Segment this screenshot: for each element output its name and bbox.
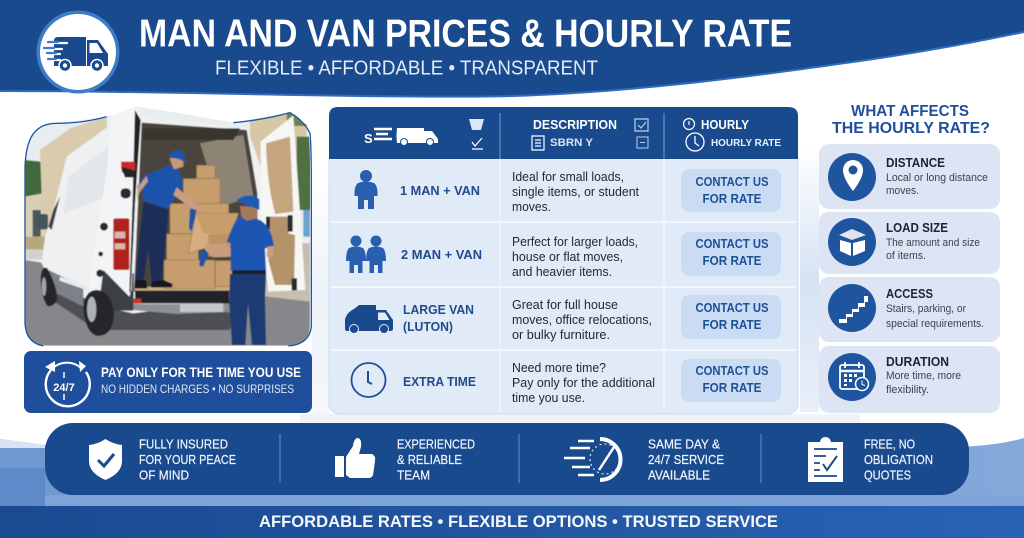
- item: experienced team: EXPERIENCED: [397, 438, 475, 452]
- row: large van: Great for full house: [512, 298, 618, 312]
- item: experienced team: [335, 438, 475, 482]
- panel: guarantees bar: [45, 423, 969, 495]
- row: large van: CONTACT US: [696, 300, 769, 315]
- item: fully insured: FOR YOUR PEACE: [139, 453, 236, 467]
- row: extra time: CONTACT US: [696, 363, 769, 378]
- panel: duration: flexibility.: [886, 384, 929, 396]
- row: 1 man + van: [354, 169, 781, 214]
- row: 1 man + van: CONTACT US: [696, 174, 769, 189]
- row: 2 man + van: 2 MAN + VAN: [401, 247, 482, 262]
- panel: distance: [819, 144, 1000, 209]
- icon: map pin: [843, 160, 863, 191]
- panel: load size: [819, 212, 1000, 274]
- table header: [329, 107, 798, 159]
- row: extra time: FOR RATE: [702, 380, 762, 395]
- footer band: [0, 506, 1024, 538]
- item: free quotes: FREE, NO: [864, 438, 915, 452]
- item: free quotes: [808, 437, 933, 482]
- panel: distance: Local or long distance: [886, 172, 988, 184]
- row: large van: [345, 295, 781, 342]
- panel: pay only for time you use: PAY ONLY FOR THE TIME YOU USE: [101, 364, 301, 380]
- icon: shield: [89, 439, 122, 480]
- item: experienced team: & RELIABLE: [397, 453, 462, 467]
- icon: person: [354, 170, 378, 209]
- icon: van logo badge: [36, 10, 120, 94]
- icon: clipboard: [808, 437, 843, 482]
- heading: what affects the hourly rate: WHAT AFFECTS: [851, 103, 969, 120]
- table header: HOURLY RATE: [711, 137, 781, 149]
- row: large van: LARGE VAN: [403, 302, 474, 317]
- icon: luton van: [345, 305, 393, 334]
- row: large van: FOR RATE: [702, 317, 762, 332]
- panel: distance: moves.: [886, 185, 919, 197]
- icon: header van: S: [364, 131, 373, 146]
- panel: duration: DURATION: [886, 355, 949, 369]
- heading: what affects the hourly rate: THE HOURLY RATE?: [832, 120, 990, 137]
- footer band: AFFORDABLE RATES • FLEXIBLE OPTIONS • TRUSTED SERVICE: [259, 513, 778, 531]
- icon: calendar with clock: [840, 362, 868, 390]
- row: 1 man + van: single items, or student: [512, 185, 640, 199]
- row: 2 man + van: Perfect for larger loads,: [512, 235, 638, 249]
- panel: distance: DISTANCE: [886, 156, 945, 170]
- table header: HOURLY: [701, 118, 750, 132]
- panel: access: [819, 277, 1000, 342]
- panel: pay only for time you use: [24, 351, 312, 413]
- icon: stairs: [839, 296, 868, 323]
- icon: header van: [364, 128, 438, 146]
- item: same day service: 24/7 SERVICE: [648, 453, 724, 467]
- icon: box: [839, 229, 866, 256]
- row: 2 man + van: house or flat moves,: [512, 250, 623, 264]
- panel: load size: LOAD SIZE: [886, 221, 948, 235]
- item: experienced team: TEAM: [397, 468, 430, 482]
- icon: 24/7 clock: 24/7: [53, 382, 75, 394]
- item: same day service: SAME DAY &: [648, 438, 721, 452]
- panel: price table: [329, 107, 798, 414]
- icon: fast clock: [564, 439, 620, 480]
- row: 2 man + van: and heavier items.: [512, 265, 612, 279]
- photo: movers loading a van: [20, 100, 320, 353]
- table header: DESCRIPTION: [533, 118, 617, 132]
- row: extra time: EXTRA TIME: [403, 374, 476, 389]
- bottom wave background: [0, 438, 1024, 506]
- panel: access: Stairs, parking, or: [886, 303, 966, 315]
- row: extra time: Pay only for the additional: [512, 376, 655, 390]
- item: same day service: AVAILABLE: [648, 468, 710, 482]
- row: 2 man + van: [346, 232, 781, 279]
- row: extra time: Need more time?: [512, 361, 606, 375]
- panel: pay only for time you use: NO HIDDEN CHARGES • NO SURPRISES: [101, 382, 294, 396]
- title: MAN AND VAN PRICES & HOURLY RATE: [139, 12, 792, 56]
- panel: duration: More time, more: [886, 370, 961, 382]
- header band: [0, 0, 1024, 98]
- panel: access: ACCESS: [886, 287, 933, 301]
- row: 1 man + van: FOR RATE: [702, 191, 762, 206]
- table header: SBRN Y: [550, 137, 594, 149]
- item: fully insured: FULLY INSURED: [139, 438, 228, 452]
- icon: 24/7 clock: [45, 361, 90, 406]
- subtitle: FLEXIBLE • AFFORDABLE • TRANSPARENT: [215, 58, 598, 80]
- item: free quotes: QUOTES: [864, 468, 911, 482]
- row: large van: or bulky furniture.: [512, 328, 610, 342]
- row: 1 man + van: Ideal for small loads,: [512, 170, 624, 184]
- row: 1 man + van: moves.: [512, 200, 551, 214]
- heading: what affects the hourly rate: [832, 103, 990, 137]
- row: extra time: [352, 359, 781, 405]
- icon: two people: [346, 236, 386, 273]
- item: fully insured: OF MIND: [139, 468, 189, 482]
- panel: load size: of items.: [886, 250, 926, 262]
- row: 1 man + van: 1 MAN + VAN: [400, 183, 480, 198]
- icon: thumbs up: [335, 438, 375, 478]
- row: large van: moves, office relocations,: [512, 313, 652, 327]
- item: free quotes: OBLIGATION: [864, 453, 933, 467]
- item: same day service: [564, 438, 724, 482]
- panel: access: special requirements.: [886, 318, 984, 330]
- row: 2 man + van: FOR RATE: [702, 253, 762, 268]
- icon: clock: [352, 363, 386, 397]
- row: 2 man + van: CONTACT US: [696, 236, 769, 251]
- panel: load size: The amount and size: [886, 237, 980, 249]
- panel: duration: [819, 346, 1000, 413]
- row: large van: (LUTON): [403, 319, 453, 334]
- item: fully insured: [89, 438, 236, 482]
- row: extra time: time you use.: [512, 391, 585, 405]
